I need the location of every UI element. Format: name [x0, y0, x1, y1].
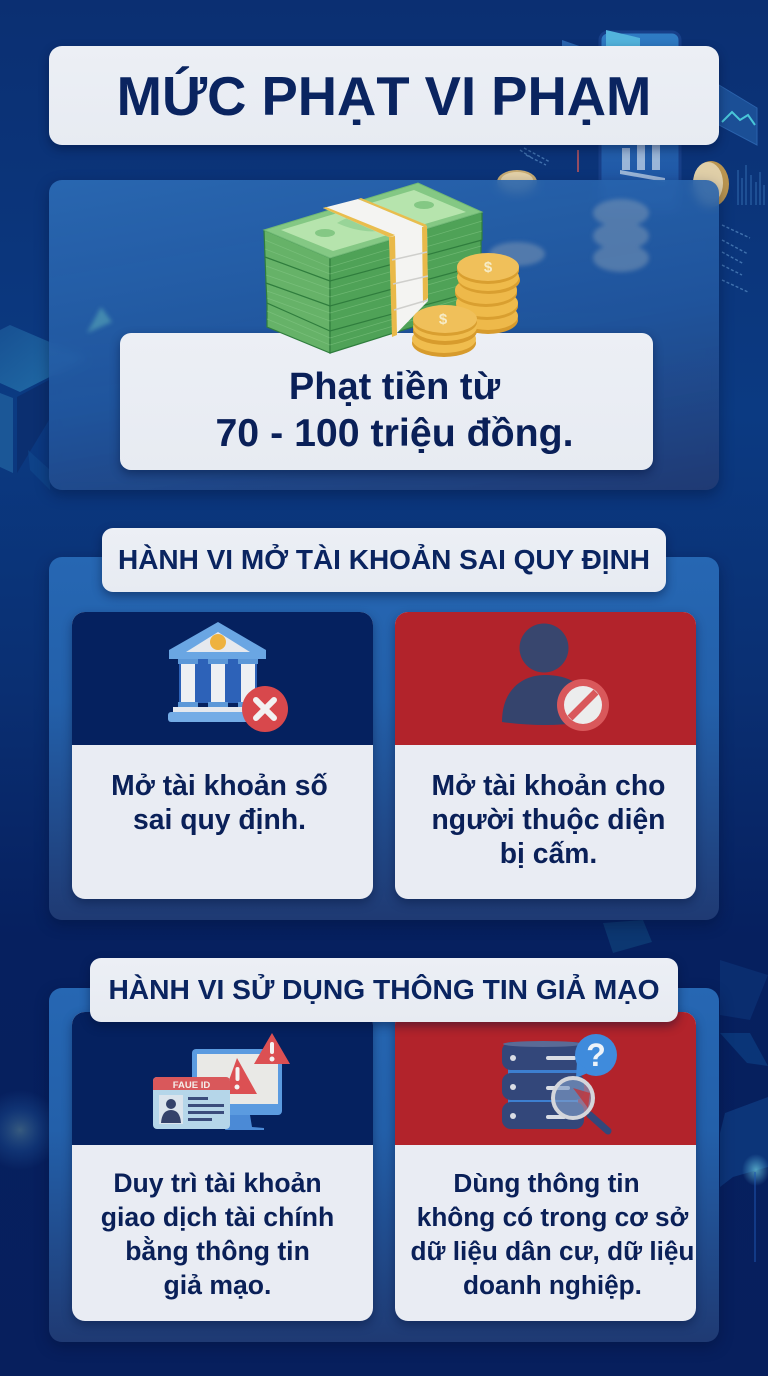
text: bị cấm.: [500, 837, 597, 869]
text: dữ liệu dân cư, dữ liệu: [411, 1236, 694, 1266]
text: giao dịch tài chính: [101, 1202, 334, 1232]
card header navy: [72, 612, 373, 745]
heading: section 3: [90, 958, 678, 1022]
heading: section 2: [102, 528, 666, 592]
title banner: [49, 46, 719, 145]
text: [101, 1168, 334, 1300]
text: [432, 769, 665, 869]
heading: section 3: HÀNH VI SỬ DỤNG THÔNG TIN GIẢ MẠO: [108, 973, 660, 1005]
icon: stack of cash and coins: $: [439, 311, 448, 328]
card: banned person: [395, 612, 696, 899]
text: Duy trì tài khoản: [113, 1168, 322, 1198]
panel: fine amount: [49, 180, 719, 490]
callout: fine amount text: Phạt tiền từ: [289, 366, 500, 408]
icon: fake id and monitor: FAUE ID: [173, 1080, 210, 1091]
card header red: [395, 612, 696, 745]
card header navy: [72, 1012, 373, 1145]
text: Dùng thông tin: [453, 1168, 640, 1198]
panel: improper account opening: [49, 557, 719, 920]
callout: fine amount text: 70 - 100 triệu đồng.: [215, 411, 574, 455]
text: giả mạo.: [164, 1270, 271, 1300]
text: không có trong cơ sở: [417, 1202, 688, 1232]
icon: stack of cash and coins: $: [484, 259, 493, 276]
title banner: MỨC PHẠT VI PHẠM: [117, 66, 651, 127]
text: Mở tài khoản cho: [432, 769, 665, 801]
text: doanh nghiệp.: [463, 1270, 642, 1300]
panel: fake information: [49, 988, 719, 1342]
text: bằng thông tin: [125, 1236, 310, 1266]
blurred scene behind panel: [87, 197, 650, 333]
text: người thuộc diện: [432, 803, 665, 835]
heading: section 2: HÀNH VI MỞ TÀI KHOẢN SAI QUY ĐỊNH: [118, 544, 650, 575]
callout: fine amount text: [120, 333, 653, 470]
text: [411, 1168, 694, 1300]
card: wrong account opening: [72, 612, 373, 899]
card: data not in database: [395, 1012, 696, 1321]
card header red: [395, 1012, 696, 1145]
icon: database with magnifier: ?: [586, 1037, 606, 1073]
card: fake info account: [72, 1012, 373, 1321]
text: Mở tài khoản số: [111, 769, 328, 801]
text: sai quy định.: [133, 803, 306, 835]
text: [111, 769, 328, 835]
